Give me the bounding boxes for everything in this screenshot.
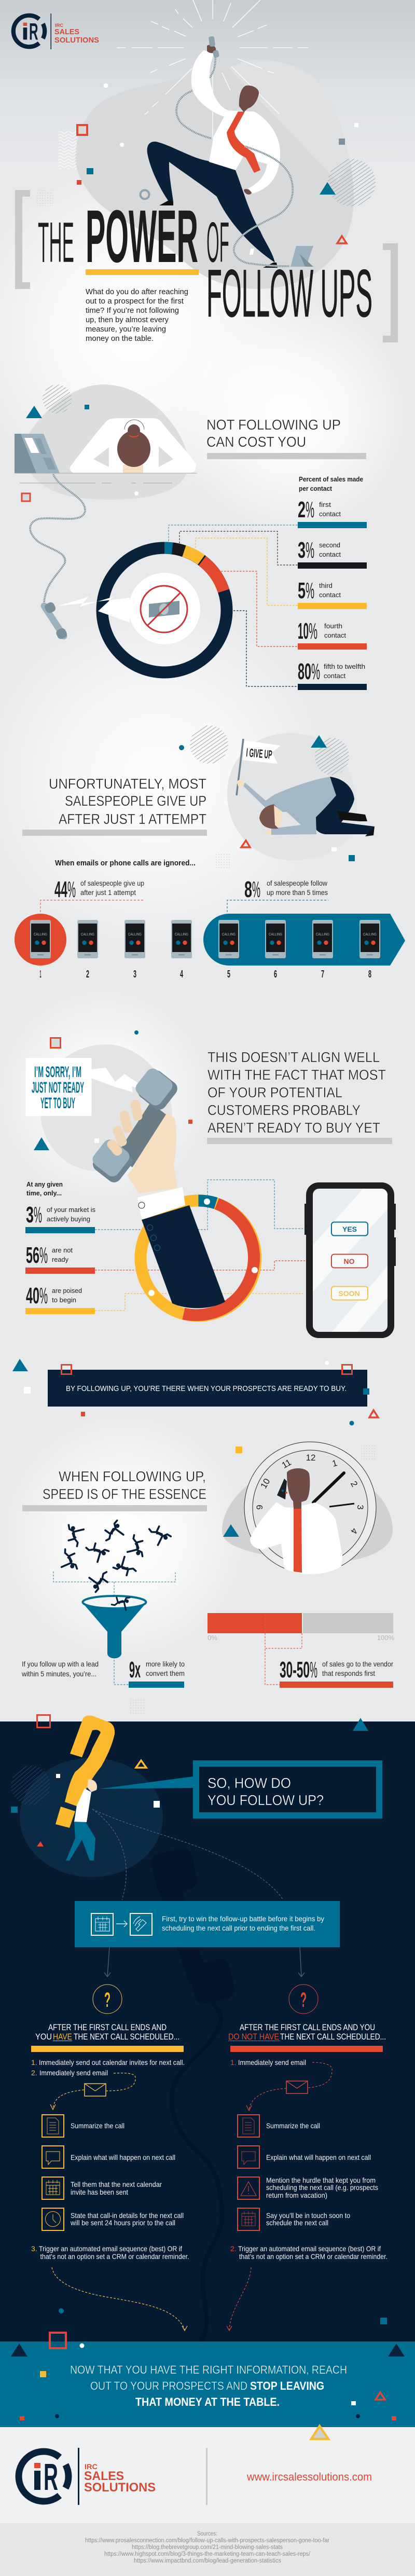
phone 3 [125,920,145,958]
stat: 3% second contact: 3 [298,538,306,563]
attempt numbers: 4 [180,969,183,980]
heading: most salespeople give up [22,776,207,836]
list item 1: 1. [230,2058,237,2067]
dashed connectors: sales per contact [169,525,298,686]
stat: 5% third contact [298,578,367,609]
person: shirt and arms [70,418,196,473]
step: mention the hurdle: scheduling the next call (e.g. prospects [266,2183,378,2192]
man: head [287,1468,310,1509]
teal arrow: attempts five to eight [203,914,405,966]
button: no [331,1255,368,1268]
stat: 44 percent give up after one attempt: after just 1 attempt [80,888,136,897]
step: calendar invite [42,2177,162,2199]
clock numerals: 12 [306,1453,315,1463]
bar chart: share of sales [208,1613,394,1685]
panel: call to action: THAT MONEY AT THE TABLE. [135,2395,280,2408]
icon: calendar [91,1913,113,1935]
stat: 44 percent give up after one attempt: of salespeople give up [80,879,144,887]
phones row [30,920,380,958]
stat: 2% first contact: 2 [298,497,306,522]
list items: 1. [31,2058,37,2067]
list item 3 [31,2244,189,2261]
decorative shapes: banner [12,1359,378,1459]
stats: market readiness [25,1181,95,1314]
icon: phone cord upper [176,56,215,139]
heading: speed is of the essence [22,1468,207,1511]
phone 2 [77,920,98,958]
stat: 8 percent follow up more than five times [227,877,328,912]
flag: I give up: I GIVE UP [246,746,273,761]
stat: 80% fifth to twelfth contact [298,659,367,690]
stat: 8 percent follow up more than five times: 8 [244,877,252,902]
phone 5 [218,920,239,958]
red highlight: first attempt [15,914,66,966]
panel: call to action: NOW THAT YOU HAVE THE RIGHT INFORMATION, REACH [70,2363,347,2376]
legend: percent of sales made per contact: per contact [299,485,333,492]
clock numerals: 3 [355,1505,365,1510]
icon: phone base [250,246,313,267]
stat: 10% fourth contact: fourth [324,622,342,630]
heading: speed is of the essence: WHEN FOLLOWING UP, [59,1468,206,1484]
speech callout: so how do you follow up: YOU FOLLOW UP? [208,1792,324,1808]
stat: 3% second contact [298,538,367,569]
title underline [86,269,199,275]
stat: 10% fourth contact: % [309,618,317,644]
column heading: AFTER THE FIRST CALL ENDS AND YOU [240,2023,375,2032]
button: yes [331,1222,368,1236]
panel: call to action: STOP LEAVING [250,2379,324,2392]
clock hands [313,1473,344,1503]
icon: yellow question [93,1985,122,2014]
icon: smartphone with yes no soon [305,1182,396,1338]
man: necktie [294,1509,302,1573]
logo: IRC Sales Solutions header: R [29,18,38,45]
question mark [56,1716,115,1828]
phone 4: CALLING [175,933,188,936]
icon: red question [289,1985,318,2014]
stat: 56 percent: % [39,1243,48,1268]
man: shirt [250,1502,342,1574]
icon: handset [209,36,219,58]
illustration: man giving up with flag [179,725,375,868]
step: mention the hurdle [238,2176,378,2199]
stat: 8 percent follow up more than five times: % [252,877,260,902]
icon: phone cord and handset [30,474,85,640]
phone 8: CALLING [363,933,377,936]
banner: by following up [48,1370,367,1407]
donut markers [148,1199,258,1296]
fingers [105,1099,143,1158]
phone 6 [265,920,286,958]
donut chart: percent of sales per contact [102,548,227,672]
stat: 2% first contact: contact [319,510,341,518]
intro paragraph: money on the table. [86,334,154,343]
decorative shapes: section four [34,1030,192,1171]
panel: footer [0,2426,415,2523]
panel: sources: Sources: [197,2531,217,2537]
panel: sources: https://www.impactbnd.com/blog/lead-generation-statistics [134,2558,281,2564]
sleeve [142,1205,225,1308]
man: trousers [315,777,375,834]
stat: nine times more likely: 9x [129,1657,141,1683]
step: calendar invite: Tell them that the next calendar [71,2180,162,2188]
speech bubble: not ready to buy: JUST NOT READY [32,1079,84,1096]
forearm and hand [127,1110,177,1193]
phone 8 [359,920,380,958]
column heading: AFTER THE FIRST CALL ENDS AND [48,2023,167,2032]
column heading: DO NOT HAVE [228,2032,279,2042]
icon: phone ringing [130,1913,152,1935]
clock numerals: 9 [255,1505,265,1510]
legend: percent of sales made per contact [298,475,367,690]
phone 2: CALLING [81,933,94,936]
stat: 8 percent follow up more than five times: up more than 5 times [267,888,328,897]
stat: 5% third contact: contact [319,591,341,599]
stat: 44 percent give up after one attempt: 44 [54,877,67,902]
man: head [239,86,259,112]
column heading: THE NEXT CALL SCHEDULED... [280,2032,386,2042]
icon: arrow [116,1921,127,1927]
icon: red question: ? [300,1989,307,2012]
logo: IRC Sales Solutions footer: R [44,2457,58,2498]
subheading: when emails or phone calls are ignored: When emails or phone calls are ignored... [55,859,196,867]
stat: 10% fourth contact [298,618,367,650]
man: sweater [242,777,336,835]
stat: 3 percent: actively buying [47,1215,90,1223]
illustration: hero blob and climbing salesman [75,0,354,289]
stats: market readiness: At any given [26,1181,63,1188]
stat: 3% second contact: contact [319,550,341,558]
head [87,1780,97,1792]
phone 7: CALLING [316,933,329,936]
phone 3: CALLING [128,933,142,936]
logo: IRC Sales Solutions footer [19,2448,156,2505]
speech bubble: not ready to buy [26,1058,148,1116]
heading: not following up [206,417,366,459]
column heading [35,2023,179,2042]
intro paragraph: time? If you’re not following [86,306,179,315]
list item 2: that’s not an option set a CRM or calendar reminder. [239,2252,388,2261]
stat: 5% third contact: 5 [298,578,306,603]
icon: desk phone [15,434,60,473]
step: call-in details [42,2208,184,2230]
heading: does not align: CUSTOMERS PROBABLY [208,1102,361,1118]
heading: speed is of the essence: SPEED IS OF THE ESSENCE [43,1486,206,1502]
heading: does not align: OF YOUR POTENTIAL [208,1084,342,1100]
stat: 80% fifth to twelfth contact: % [311,659,320,684]
panel: sources: https://www.prosalesconnection.com/blog/follow-up-calls-with-prospects-salesperson-gone-too-far [85,2538,329,2544]
attempt numbers: 8 [368,969,371,980]
step: mention the hurdle: return from vacation) [266,2191,327,2199]
step: be in touch [238,2208,350,2230]
icon: no money circle [58,573,200,644]
phone 5: CALLING [222,933,236,936]
step: summarize: Summarize the call [71,2122,125,2130]
illustration: leads falling into funnel [53,1520,175,1685]
heading: most salespeople give up: SALESPEOPLE GIVE UP [65,793,206,809]
logo: IRC Sales Solutions header: IRC [55,23,63,29]
column heading [228,2023,386,2042]
stat: 5% third contact: third [319,582,333,589]
legend: percent of sales made per contact: Percent of sales made [299,475,363,483]
stat: 8 percent follow up more than five times: of salespeople follow [267,879,328,887]
button: yes: YES [342,1225,357,1233]
heading: does not align [207,1049,392,1144]
attempt numbers: 1 [39,969,42,980]
step: summarize [42,2115,125,2137]
step: be in touch: schedule the next call [266,2219,328,2227]
stat: 10% fourth contact: contact [324,631,346,639]
stat: 56 percent: ready [52,1256,68,1263]
panel: first try to win: First, try to win the follow-up battle before it begins by [162,1914,324,1923]
speech bubble: not ready to buy: I’M SORRY, I’M [34,1064,81,1081]
panel: sources: https://www.highspot.com/blog/3-things-the-marketing-team-can-teach-sales-reps/ [104,2551,311,2557]
attempt numbers: 7 [321,969,324,980]
intro paragraph: out to a prospect for the first [86,297,184,306]
stat: 3 percent: % [34,1202,42,1228]
heading: most salespeople give up: UNFORTUNATELY, MOST [49,776,206,792]
stat: 2% first contact [298,497,367,528]
speech bubble: not ready to buy: YET TO BUY [40,1095,75,1112]
attempt numbers [39,969,371,980]
ghost handset and cord [150,1847,236,2341]
dashed path lines [92,1809,305,1977]
phone 6: CALLING [269,933,282,936]
stat: 40 percent: are poised [52,1287,82,1294]
stat: 5% third contact: % [306,578,314,603]
stat: 30 to 50 percent: % [310,1657,317,1683]
stat: 3 percent: 3 [26,1202,34,1228]
button: soon [331,1287,368,1300]
stat: 3% second contact: % [306,538,314,563]
dashed arrow [52,2267,187,2331]
step: call-in details: State that call-in details for the next call [71,2211,184,2220]
illustration: discouraged salesperson at desk [15,384,197,501]
stat: 30 to 50 percent [280,1657,393,1688]
man: trousers [147,142,275,263]
step: explain: Explain what will happen on next call [266,2153,371,2161]
list items: Immediately send out calendar invites for next call. [39,2058,185,2067]
funnel [82,1602,147,1658]
list item 3: Trigger an automated email sequence (best) OR if [39,2244,182,2253]
falling leads [62,1520,171,1592]
heading: most salespeople give up: AFTER JUST 1 ATTEMPT [59,811,206,827]
step: explain [42,2146,175,2168]
logo: IRC Sales Solutions footer: SOLUTIONS [84,2481,156,2495]
stat: 80% fifth to twelfth contact: 80 [298,659,311,684]
handset handle [117,1103,166,1167]
icon: yellow question: ? [104,1989,110,2012]
stat: 2% first contact: first [319,501,331,508]
stat: 30 to 50 percent: 30-50 [280,1657,310,1683]
list item 2 [230,2244,388,2261]
stat: 40 percent: 40 [26,1283,39,1308]
banner: by following up: BY FOLLOWING UP, YOU’RE THERE WHEN YOUR PROSPECTS ARE READY TO BUY. [66,1385,347,1393]
illustration: man carrying question mark [56,1716,115,1861]
stat: nine times more likely: within 5 minutes, you’re... [21,1670,96,1678]
phone 4 [171,920,192,958]
title: POWER [86,195,198,278]
flag: I give up [237,739,281,795]
column heading: YOU [35,2032,52,2042]
heading: does not align: AREN’T READY TO BUY YET [208,1120,380,1136]
phone 1 [30,920,51,958]
man: necktie [227,112,260,173]
attempt numbers: 2 [86,969,89,980]
column heading: HAVE [53,2032,72,2042]
envelope with dashed path [50,2073,135,2110]
clock numerals: 11 [280,1457,293,1470]
decorative shapes: hero [37,83,376,243]
dashed arrow [227,2267,251,2331]
title: OF [206,211,229,274]
phone 1: CALLING [34,933,47,936]
stat: nine times more likely [21,1657,185,1688]
panel: first try to win [75,1901,340,1947]
button: soon: SOON [338,1289,360,1298]
stat: nine times more likely: convert them [146,1669,185,1677]
step: summarize [238,2115,320,2137]
shirt [74,1788,91,1822]
stat: 40 percent: % [39,1283,48,1308]
stat: 40 percent: to begin [52,1296,76,1304]
stat: 10% fourth contact: 10 [298,618,309,644]
envelope with dashed path [246,2062,332,2111]
panel: call to action: OUT TO YOUR PROSPECTS AND [90,2379,247,2392]
heading: does not align: WITH THE FACT THAT MOST [208,1067,386,1083]
bar chart: share of sales: 100% [377,1634,394,1642]
stat: 3 percent [25,1202,95,1233]
list items: Immediately send email [39,2069,108,2077]
handset caps [90,1066,181,1186]
list item 3: that’s not an option set a CRM or calendar reminder. [40,2252,189,2261]
clock numerals: 1 [331,1458,338,1469]
brackets around title [15,190,398,342]
man: phone [277,1479,287,1499]
panel: sources [0,2523,415,2576]
step: calendar invite: invite has been sent [71,2188,128,2196]
speech callout: so how do you follow up: SO, HOW DO [208,1775,291,1791]
man: shoes [159,200,278,268]
heading: does not align: THIS DOESN’T ALIGN WELL [208,1049,380,1065]
stats: market readiness: time, only... [26,1190,62,1197]
logo: IRC Sales Solutions footer: SALES [84,2469,124,2483]
donut chart: market readiness [141,1201,256,1316]
stat: 44 percent give up after one attempt: % [67,877,76,902]
panel: first try to win: scheduling the next call prior to ending the first call. [162,1924,315,1932]
man: head and hands [259,804,279,829]
stat: 44 percent give up after one attempt [40,877,144,912]
illustration: hand holding handset [90,1066,225,1308]
phone 7 [312,920,333,958]
dashed connectors: market readiness [95,1180,306,1311]
step: call-in details: will be sent 24 hours prior to the call [70,2219,175,2227]
person: head [117,420,150,467]
step: mention the hurdle: Mention the hurdle that kept you from [266,2176,376,2184]
stat: 30 to 50 percent: of sales go to the vendor [322,1660,393,1668]
stat: 2% first contact: % [306,497,314,522]
speech callout: so how do you follow up [99,1764,379,1815]
stat: 40 percent [25,1283,95,1314]
stat: 30 to 50 percent: that responds first [322,1669,375,1677]
bar chart: share of sales: 0% [208,1634,217,1642]
column: next call scheduled [31,1985,189,2331]
button: no: NO [343,1257,355,1265]
logo: IRC Sales Solutions header: SALES [54,27,79,36]
list item 1: Immediately send email [238,2058,306,2067]
step: summarize: Summarize the call [266,2122,320,2130]
clock numerals: 10 [258,1477,272,1490]
stat: nine times more likely: If you follow up with a lead [22,1660,99,1668]
panel: sources: https://blog.thebrevetgroup.com/21-mind-blowing-sales-stats [132,2544,283,2551]
clock numerals: 4 [349,1526,359,1536]
column heading: THE NEXT CALL SCHEDULED... [74,2032,179,2042]
intro paragraph: What do you do after reaching [86,287,188,296]
clock numerals [255,1453,365,1536]
heading: not following up: NOT FOLLOWING UP [206,417,341,433]
step: explain: Explain what will happen on next call [71,2153,175,2161]
list item 2: 2. [230,2244,237,2253]
logo: IRC Sales Solutions footer: IRC [85,2462,98,2471]
attempt numbers: 5 [227,969,230,980]
stat: 80% fifth to twelfth contact: contact [324,672,345,680]
panel: how do you follow up [0,1718,415,2341]
panel: call to action [0,2333,415,2427]
list items [31,2058,185,2077]
attempt numbers: 6 [274,969,277,980]
clock numerals: 2 [349,1479,359,1489]
stat: 56 percent [25,1243,95,1274]
list item 2: Trigger an automated email sequence (best) OR if [238,2244,381,2253]
list items: 2. [31,2069,37,2077]
intro paragraph: up, then by almost every [86,315,169,324]
man: hands [207,45,252,195]
intro paragraph: measure, you’re leaving [86,325,166,334]
logo: IRC Sales Solutions header: SOLUTIONS [54,36,99,45]
title [38,195,372,331]
stat: 56 percent: 56 [26,1243,39,1268]
heading: not following up: CAN COST YOU [206,434,306,450]
step: explain [238,2146,371,2168]
illustration: man on phone in front of clock [222,1442,393,1574]
list item 3: 3. [31,2244,37,2253]
step: be in touch: Say you’ll be in touch soon to [266,2211,350,2220]
trousers [66,1820,95,1861]
column: next call not scheduled [227,1985,388,2331]
man: shirt and arms [191,50,280,194]
person: neck [123,465,143,473]
cuff [137,1187,185,1220]
attempt numbers: 3 [133,969,136,980]
stat: 3% second contact: second [319,541,340,549]
icon: phone cord lower [234,146,293,266]
stat: 3 percent: of your market is [47,1206,95,1214]
stat: 80% fifth to twelfth contact: fifth to twelfth [324,663,365,670]
stat: nine times more likely: more likely to [146,1660,185,1668]
intro paragraph [86,287,188,343]
website url: www.ircsalessolutions.com [246,2471,372,2483]
stat: 56 percent: are not [52,1246,73,1254]
title: THE [38,211,74,274]
logo: IRC Sales Solutions header [13,13,99,49]
